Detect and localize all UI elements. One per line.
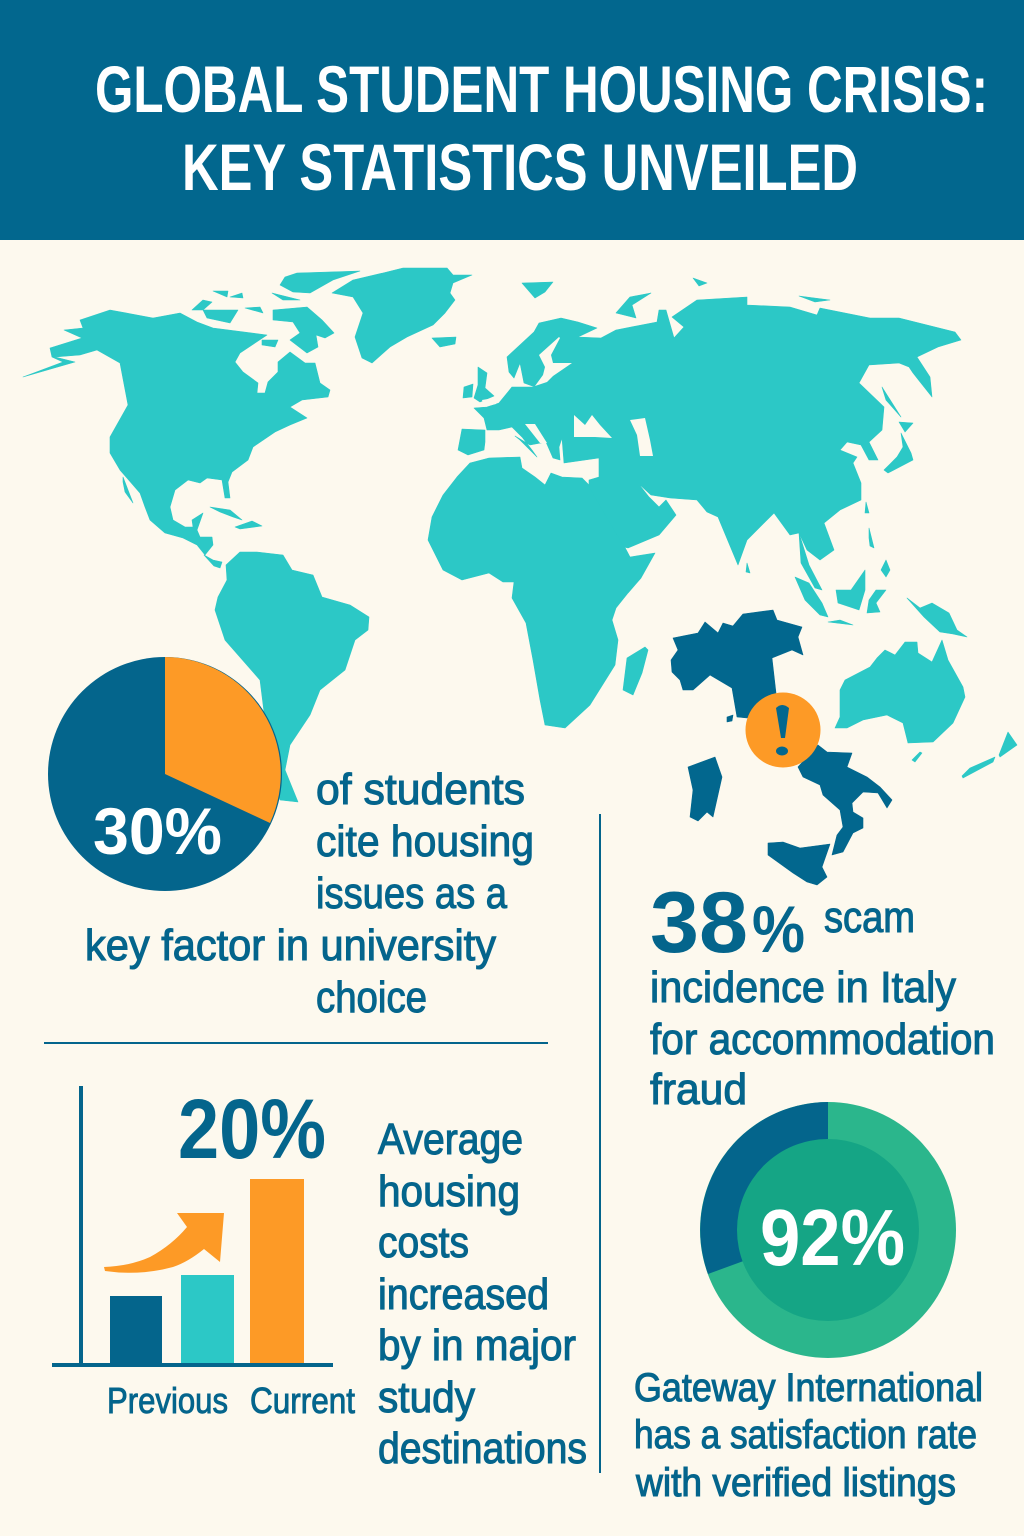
arrow: [104, 1213, 224, 1273]
text: 38% scam incidence: incidence in Italy: [650, 963, 956, 1012]
text: average housing costs: Average: [378, 1115, 523, 1164]
text: housing as key factor: choice: [316, 973, 427, 1022]
text: 38% scam incidence: for accommodation: [650, 1015, 995, 1064]
text: 38% scam incidence: %: [752, 892, 805, 966]
text: average housing costs: study: [378, 1373, 475, 1422]
text: gateway international: [634, 1366, 983, 1505]
text: housing as key factor: cite housing: [316, 817, 534, 866]
bar chart: housing costs: [52, 1082, 355, 1421]
pie chart: 30%: [48, 657, 282, 891]
pie chart: 30%: 30%: [93, 794, 222, 868]
Italy map: [671, 610, 892, 885]
text: average housing costs: by in major: [378, 1321, 576, 1370]
world map: [23, 268, 1017, 802]
text: average housing costs: destinations: [378, 1424, 587, 1473]
text: 38% scam incidence: scam: [824, 893, 915, 942]
donut chart: 92%: 92%: [760, 1193, 905, 1282]
alert icon: [746, 692, 820, 768]
text: housing as key factor: issues as a: [316, 869, 507, 918]
donut chart: 92%: [700, 1102, 956, 1358]
text: 38% scam incidence: fraud: [650, 1065, 747, 1114]
text: 38% scam incidence: 38: [650, 875, 748, 971]
text: average housing costs: housing: [378, 1167, 520, 1216]
text: gateway international: has a satisfaction rate: [634, 1413, 977, 1457]
text: average housing costs: costs: [378, 1218, 469, 1267]
text: housing as key factor: of students: [316, 765, 525, 814]
text: housing as key factor: key factor in university: [85, 921, 496, 970]
text: housing as key factor: [85, 765, 534, 1022]
text: 38% scam incidence: [650, 875, 995, 1114]
bar chart: housing costs: Previous: [107, 1380, 228, 1421]
bar chart: housing costs: Current: [250, 1380, 355, 1421]
bar chart: housing costs: 20%: [178, 1082, 326, 1176]
text: average housing costs: [378, 1115, 587, 1473]
text: gateway international: with verified listings: [635, 1461, 956, 1505]
text: gateway international: Gateway International: [634, 1366, 983, 1410]
seas: [482, 337, 653, 456]
text: average housing costs: increased: [378, 1270, 549, 1319]
title banner: [0, 0, 1024, 240]
